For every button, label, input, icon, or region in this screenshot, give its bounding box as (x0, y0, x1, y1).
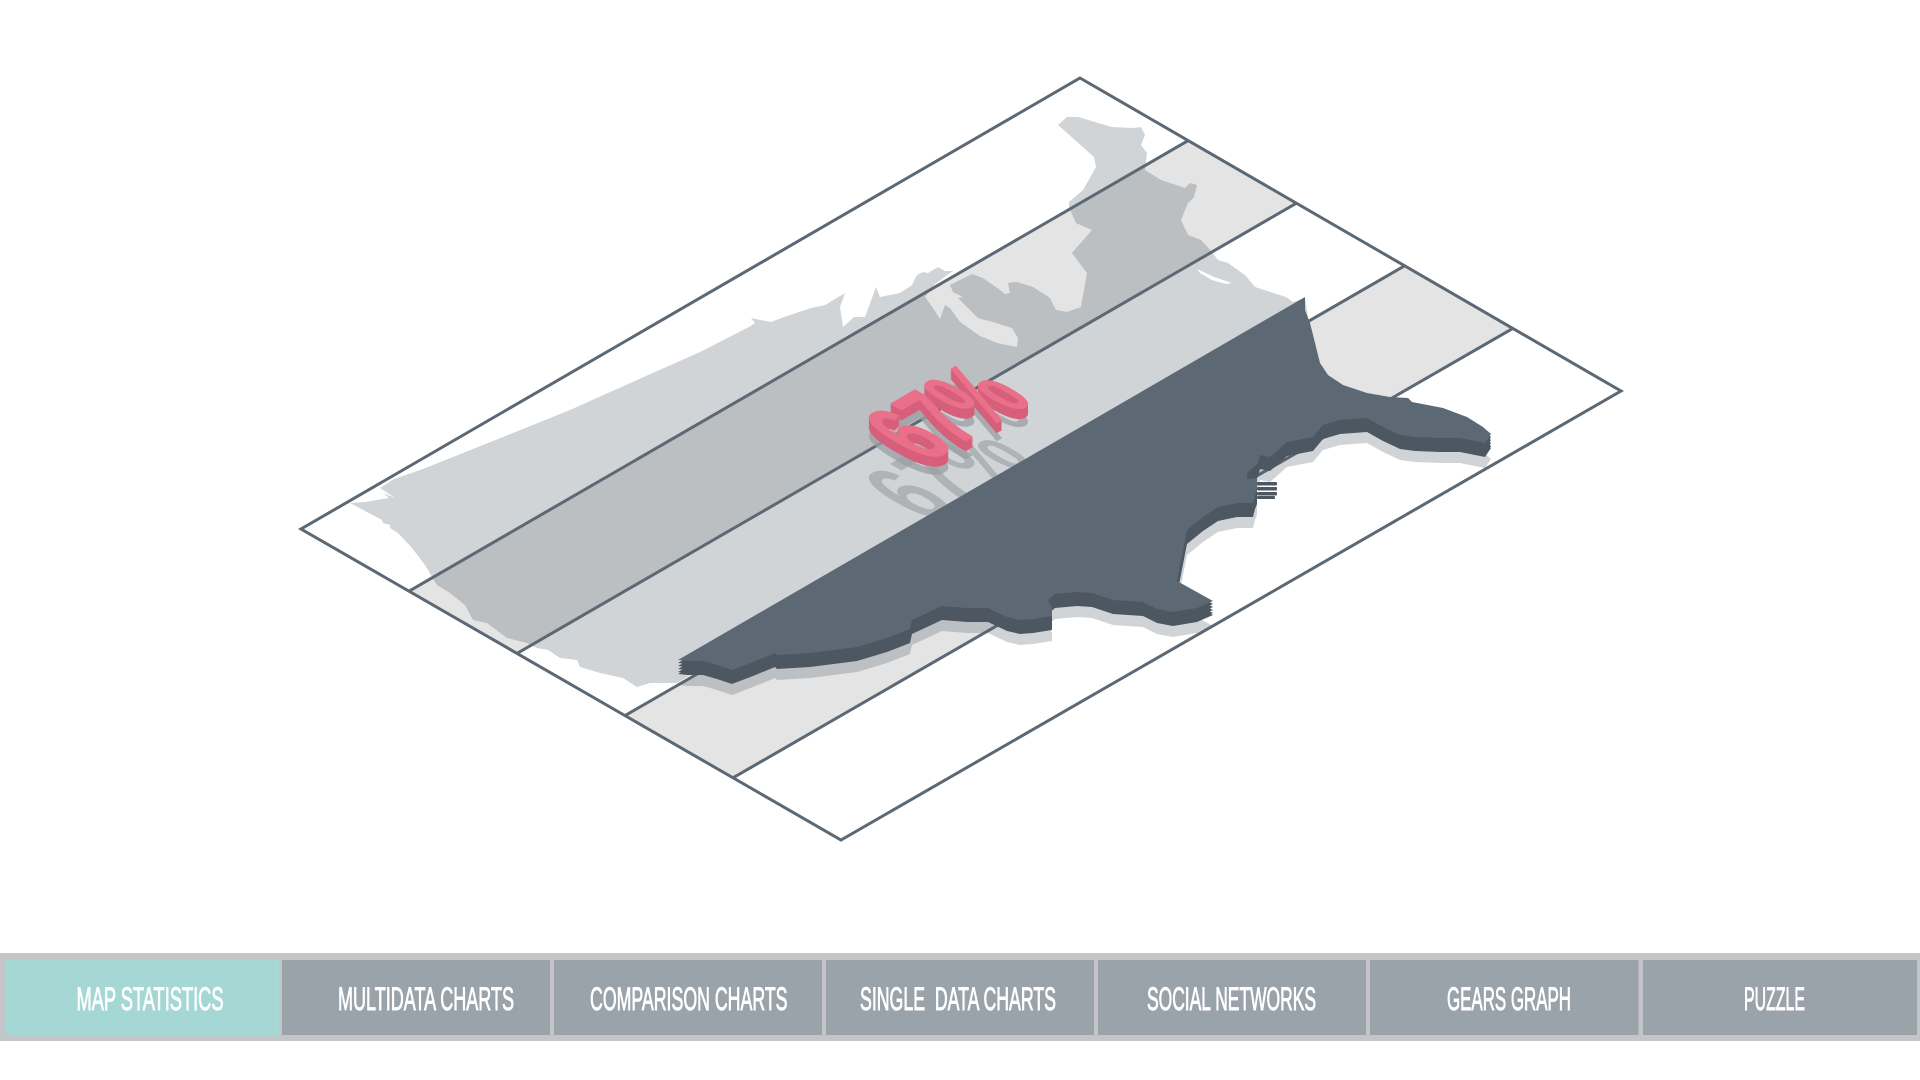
grey part of the United States map (350, 117, 1310, 687)
tab: social networks: SOCIAL NETWORKS (1147, 981, 1316, 1017)
tab: single data charts (826, 960, 1094, 1035)
67% extruded pink label (836, 348, 1058, 486)
tab: social networks (1098, 960, 1366, 1035)
grid lines (301, 78, 1621, 840)
isometric striped map panel (301, 78, 1621, 840)
tab: gears graph (1370, 960, 1638, 1035)
ground shadows of the percentage (836, 366, 1058, 536)
tab: comparison charts: COMPARISON CHARTS (590, 981, 788, 1017)
highlighted 67% of the map, extruded (678, 297, 1491, 684)
navigation bar (0, 953, 1920, 1041)
tab: multidata charts: MULTIDATA CHARTS (338, 981, 514, 1017)
ground shadow of the highlighted map (678, 322, 1491, 695)
tab: puzzle (1643, 960, 1917, 1035)
tab: single data charts: SINGLE DATA CHARTS (860, 981, 1056, 1017)
tab: map statistics (5, 960, 279, 1035)
tab: map statistics: MAP STATISTICS (76, 981, 224, 1017)
tab: puzzle: PUZZLE (1744, 981, 1805, 1017)
tab: multidata charts (282, 960, 550, 1035)
tab: comparison charts (554, 960, 822, 1035)
shaded grid bands (409, 141, 1513, 778)
tab: gears graph: GEARS GRAPH (1447, 981, 1571, 1017)
